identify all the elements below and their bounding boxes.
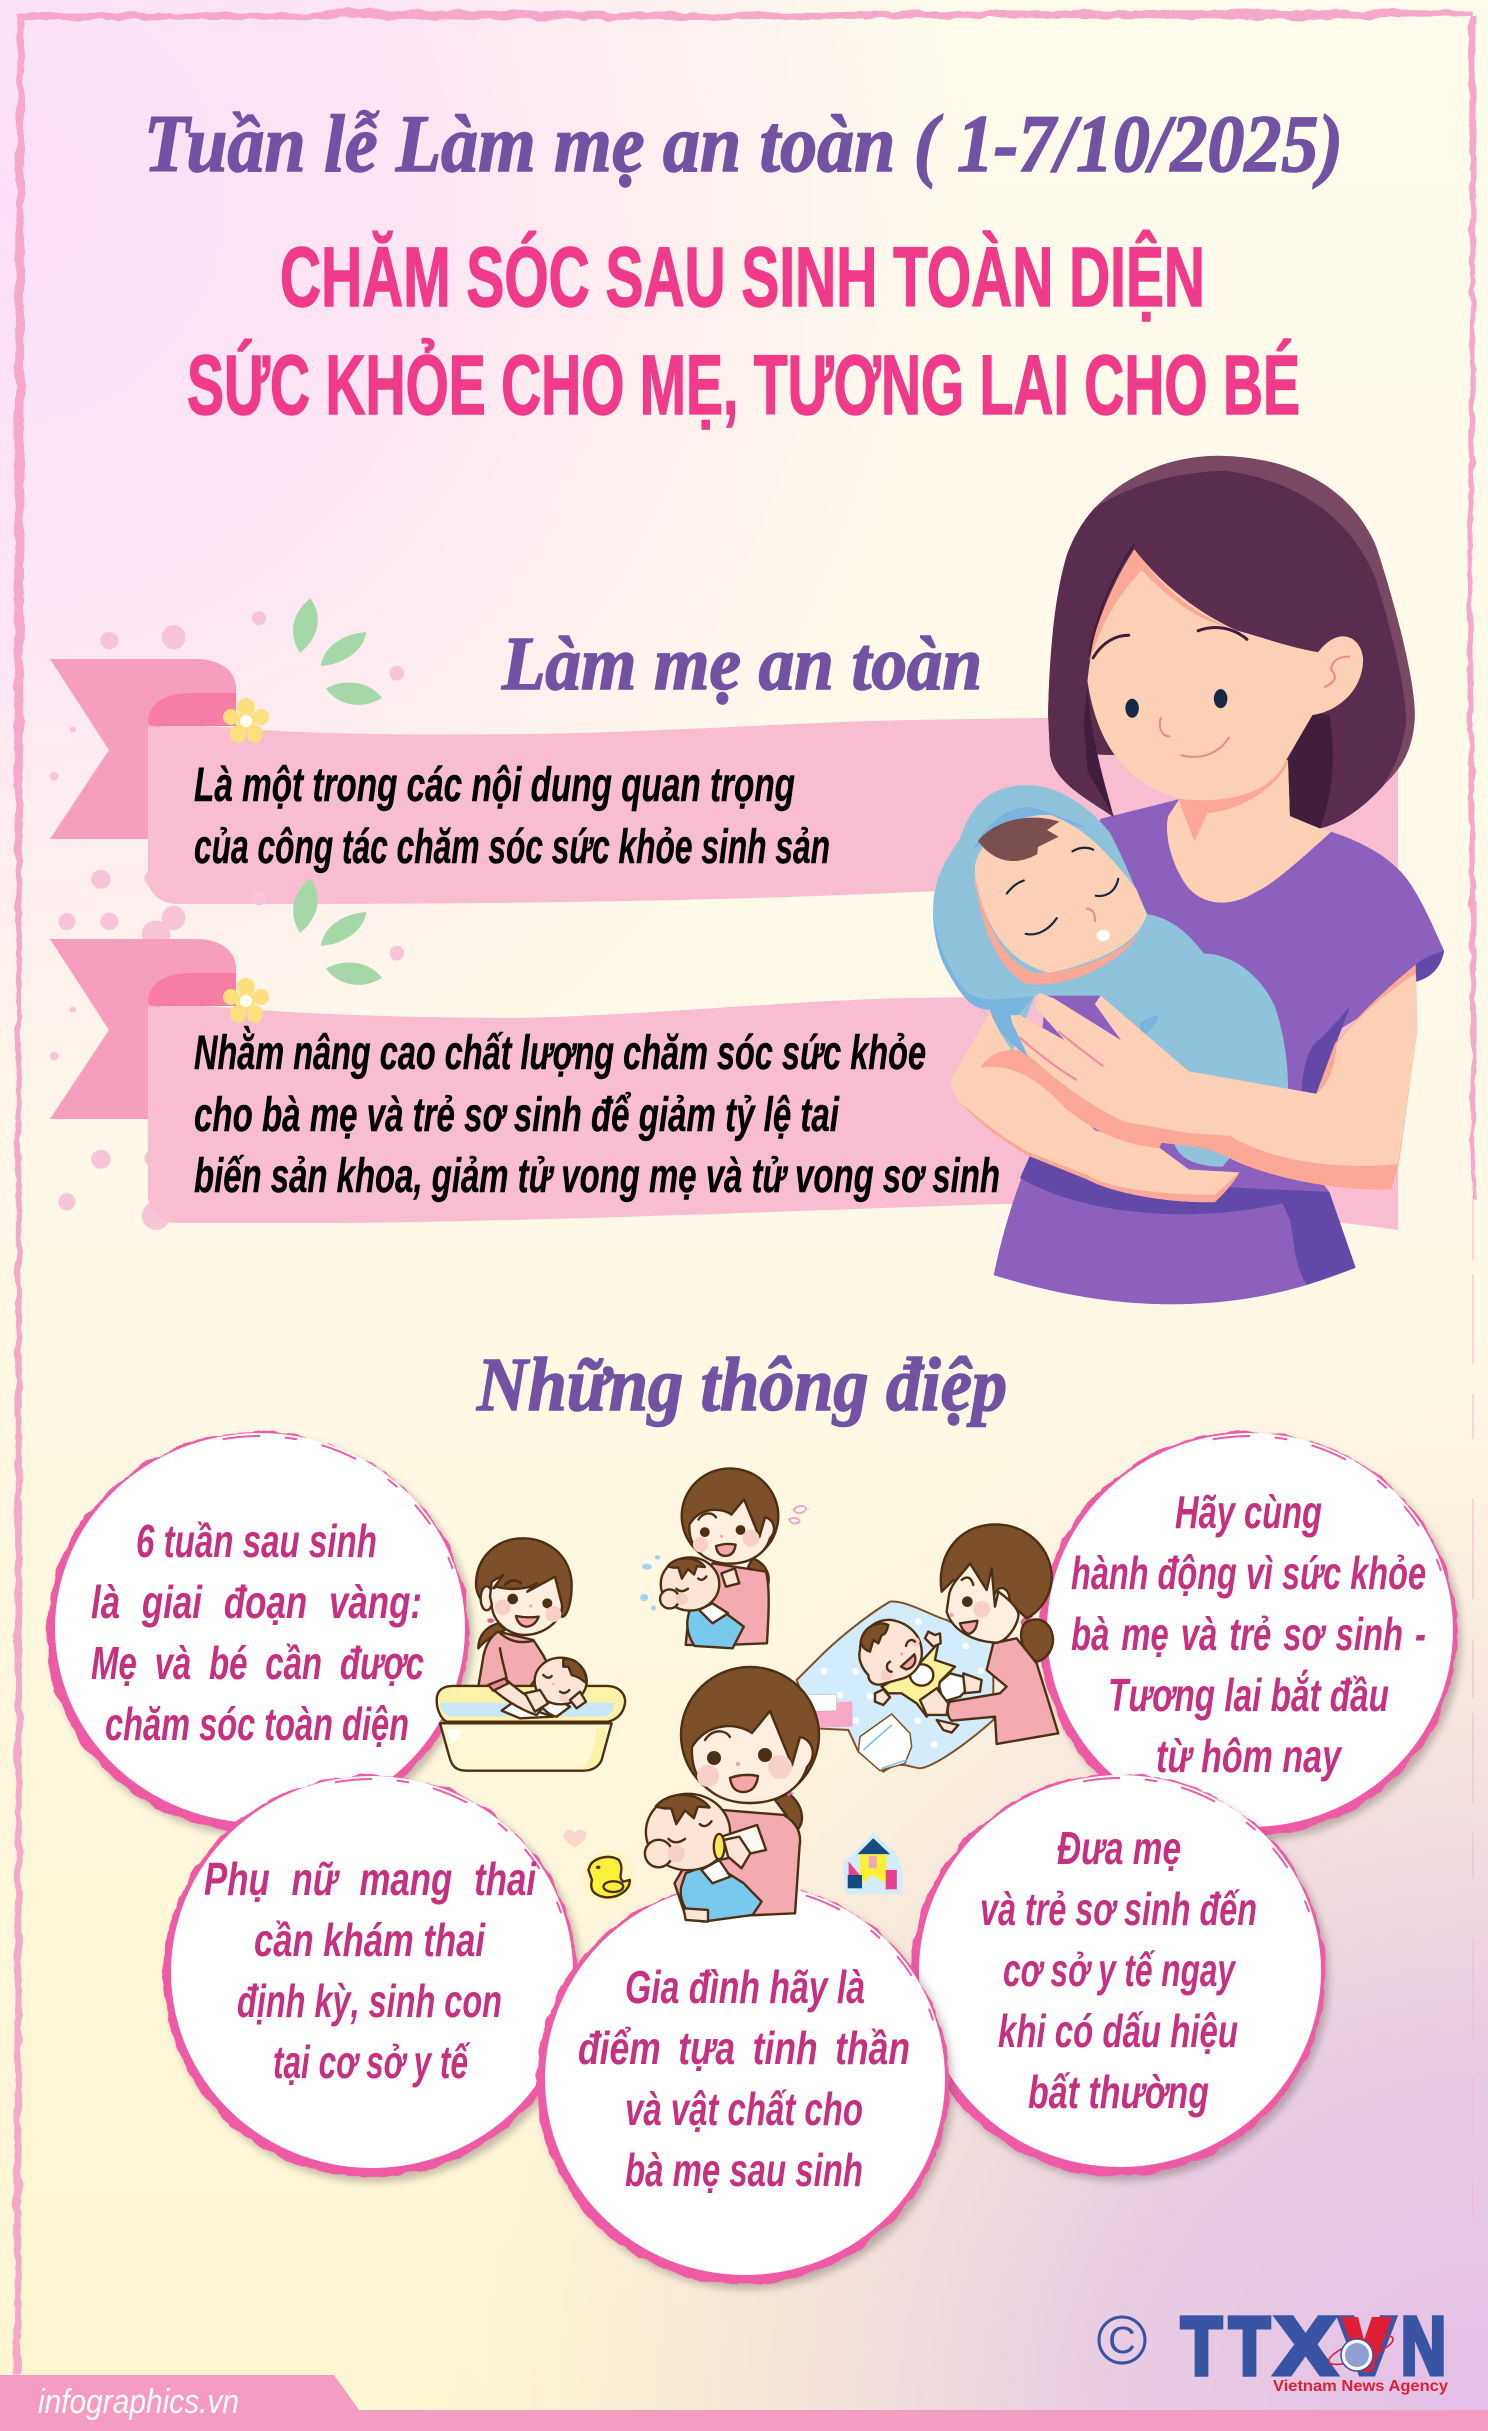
bubble 4: bring to clinic: và trẻ sơ sinh đến: [980, 1883, 1257, 1935]
bubble 4: bring to clinic: cơ sở y tế ngay: [1003, 1944, 1237, 1996]
bubble 5: act for health: Hãy cùng: [1175, 1486, 1322, 1538]
tissue box: [798, 1694, 852, 1728]
icon: flower: [223, 978, 269, 1023]
section heading: messages: Những thông điệp: [476, 1343, 1007, 1427]
illustration: mother feeding baby: [645, 1667, 819, 1922]
bubble 4: bring to clinic: bất thường: [1028, 2066, 1209, 2118]
bubble 5: act for health: [1039, 1432, 1461, 1841]
bubble 2: pregnancy checkups: Phụ nữ mang thai: [204, 1853, 537, 1905]
title: week of safe motherhood: Tuần lễ Làm mẹ an toàn ( 1-7/10/2025): [144, 98, 1343, 189]
section heading: safe motherhood: Làm mẹ an toàn: [501, 622, 982, 706]
illustration: worried mother with crying baby: [640, 1468, 806, 1648]
logo: news agency: X: [1275, 2301, 1336, 2392]
bubble 1: six golden weeks: là giai đoạn vàng:: [91, 1576, 422, 1628]
ribbon 2 with text: cho bà mẹ và trẻ sơ sinh để giảm tỷ lệ tai: [194, 1089, 840, 1142]
icon: baby bottle: [714, 1825, 766, 1868]
illustration: mother holding baby: [933, 456, 1444, 1304]
logo: news agency: V: [1339, 2301, 1395, 2392]
bubble 2: pregnancy checkups: [163, 1775, 581, 2182]
ribbon 2 with text: [50, 939, 1398, 1230]
ribbon 1 with text: Là một trong các nội dung quan trọng: [194, 759, 795, 812]
decorative dots and leaves: second ribbon: [49, 878, 404, 1230]
source label: infographics.vn: [38, 2383, 239, 2421]
bubble 3: family support: bà mẹ sau sinh: [625, 2144, 863, 2196]
logo: news agency: Vietnam News Agency: [1273, 2378, 1448, 2395]
decorative dots and leaves: first ribbon: [49, 598, 404, 946]
bubble 5: act for health: Tương lai bắt đầu: [1108, 1669, 1389, 1721]
icon: flower: [223, 698, 269, 743]
bubble 2: pregnancy checkups: định kỳ, sinh con: [237, 1975, 502, 2027]
footer bar: [0, 2375, 1488, 2431]
icon: rubber duck: [582, 1850, 636, 1903]
icon: toy blocks: [844, 1835, 901, 1893]
ribbon 2 with text: biến sản khoa, giảm tử vong mẹ và tử vong sơ sinh: [194, 1150, 1000, 1203]
bubble 3: family support: Gia đình hãy là: [625, 1961, 865, 2013]
ribbon 2 with text: Nhằm nâng cao chất lượng chăm sóc sức khỏe: [194, 1025, 926, 1080]
bubble 1: six golden weeks: [47, 1432, 473, 1837]
illustration: mother bathing baby: [437, 1538, 625, 1771]
logo: copyright mark: [1099, 2317, 1145, 2363]
bubble 2: pregnancy checkups: cần khám thai: [254, 1914, 486, 1966]
main heading: [187, 230, 1300, 432]
logo: news agency: T: [1229, 2301, 1270, 2392]
logo: news agency: [1181, 2301, 1448, 2395]
bubble 3: family support: [537, 1882, 953, 2289]
bubble 4: bring to clinic: [911, 1774, 1329, 2181]
bubble 1: six golden weeks: 6 tuần sau sinh: [136, 1515, 377, 1567]
bubble 1: six golden weeks: chăm sóc toàn diện: [105, 1698, 409, 1750]
ribbon 1 with text: [50, 659, 1398, 904]
bubble 2: pregnancy checkups: tại cơ sở y tế: [273, 2036, 471, 2088]
bubble 5: act for health: từ hôm nay: [1156, 1730, 1343, 1782]
baby in tub: [525, 1658, 587, 1717]
icon: heart: [563, 1830, 586, 1847]
logo: news agency: N: [1401, 2301, 1446, 2392]
ribbon 1 with text: của công tác chăm sóc sức khỏe sinh sản: [194, 821, 830, 874]
logo: copyright mark: C: [1108, 2320, 1136, 2362]
bubble 4: bring to clinic: Đưa mẹ: [1057, 1822, 1181, 1874]
illustration: mother changing baby: [797, 1524, 1058, 1772]
diapers: [858, 1714, 912, 1771]
bubble 4: bring to clinic: khi có dấu hiệu: [998, 2005, 1238, 2057]
logo: news agency: T: [1181, 2301, 1222, 2392]
bubble 3: family support: và vật chất cho: [625, 2083, 863, 2135]
bubble 3: family support: điểm tựa tinh thần: [578, 2022, 910, 2074]
bubble 1: six golden weeks: Mẹ và bé cần được: [91, 1637, 424, 1689]
